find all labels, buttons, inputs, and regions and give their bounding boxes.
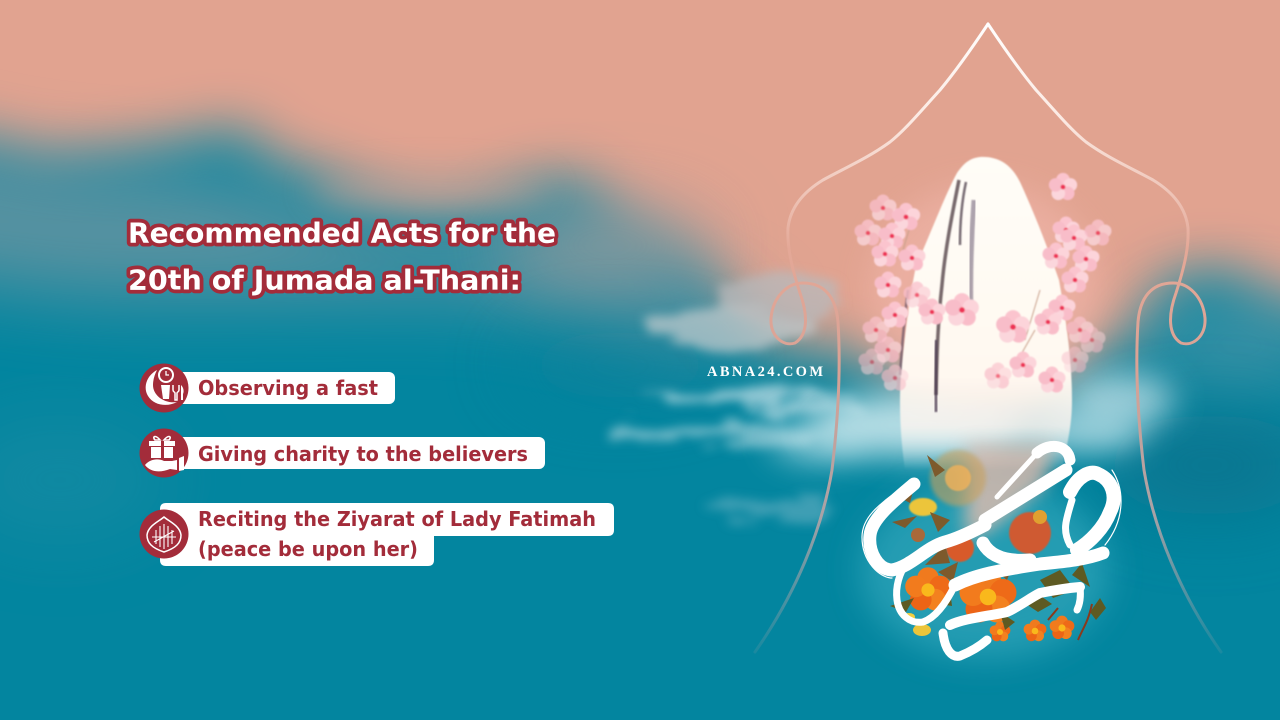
cherry blossoms <box>854 173 1112 392</box>
title: 20th of Jumada al-Thani: <box>128 264 521 296</box>
label: Observing a fast <box>198 376 378 400</box>
title: Recommended Acts for the <box>128 216 556 250</box>
label <box>198 507 596 561</box>
label: Reciting the Ziyarat of Lady Fatimah <box>198 507 596 531</box>
icon: crescent, clock, cup and fork <box>140 364 188 412</box>
pill <box>165 372 395 404</box>
label: (peace be upon her) <box>198 537 418 561</box>
list item: reciting the ziyarat <box>140 503 614 566</box>
title <box>128 216 556 296</box>
label: Giving charity to the believers <box>198 442 528 466</box>
pill <box>160 503 614 566</box>
watermark: ABNA24.COM: ABNA24.COM <box>707 364 823 380</box>
pill <box>165 437 545 469</box>
floral ornament <box>890 445 1106 641</box>
list item: observing a fast <box>140 364 395 412</box>
figure: veiled woman <box>900 157 1072 470</box>
icon: hand holding gift <box>140 428 188 478</box>
list item: giving charity <box>140 428 545 478</box>
clouds <box>610 185 1175 660</box>
icon: dome calligraphy <box>140 510 188 558</box>
arch outline <box>755 24 1221 652</box>
calligraphy: white swirl <box>862 400 1121 656</box>
